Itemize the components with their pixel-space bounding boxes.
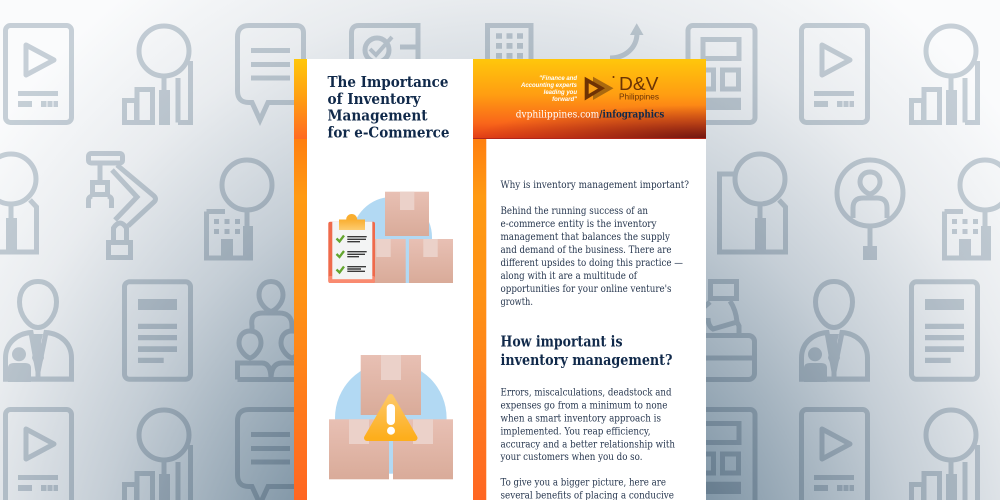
title: Management xyxy=(328,108,428,125)
section heading xyxy=(500,334,672,369)
tagline: "Finance and xyxy=(539,76,577,82)
intro text: Why is inventory management important? xyxy=(500,179,689,191)
icon: video document row 4 xyxy=(6,410,72,500)
body text: when a smart inventory approach is xyxy=(500,412,661,424)
illustration: boxes with checklist xyxy=(328,192,453,283)
clipboard xyxy=(328,214,375,283)
left accent strip xyxy=(294,59,307,500)
illustration: boxes with warning xyxy=(329,355,453,479)
icon: office building xyxy=(488,26,531,59)
warning sign xyxy=(367,397,414,438)
bottom right box xyxy=(393,419,453,479)
intro text: growth. xyxy=(500,296,533,308)
icon: building magnifier left xyxy=(206,160,272,260)
tagline xyxy=(520,76,578,103)
icon: business person xyxy=(3,282,74,382)
icon: layout document xyxy=(688,26,755,122)
page panel xyxy=(294,59,706,500)
bottom right box xyxy=(409,239,453,283)
title xyxy=(328,74,450,141)
icon: speech bubble row 4 xyxy=(238,410,304,500)
body text: your customers when you do so. xyxy=(500,451,642,463)
intro text: e-commerce entity is the inventory xyxy=(500,218,657,230)
body text: implemented. You reap efficiency, xyxy=(500,426,650,438)
top box xyxy=(385,192,429,236)
intro text: different upsides to doing this practice — xyxy=(500,257,683,269)
icon: chart magnifier row 4 xyxy=(124,410,190,500)
title: for e-Commerce xyxy=(328,124,450,141)
tagline: leading you xyxy=(544,90,577,96)
bottom left box xyxy=(362,239,406,283)
intro text: opportunities for your online venture's xyxy=(500,283,672,295)
tagline: Accounting experts xyxy=(520,83,578,89)
icon: person in magnifier xyxy=(837,160,903,260)
logo wordmark: Philippines xyxy=(619,92,659,101)
website link xyxy=(516,109,665,120)
icon: speech bubble xyxy=(238,26,304,120)
body text: expenses go from a minimum to none xyxy=(500,400,668,412)
icon: building magnifier right xyxy=(944,160,1000,260)
icon: chart magnifier xyxy=(124,26,190,125)
website link: /infographics xyxy=(599,109,665,120)
icon: layout document row 4 xyxy=(688,410,755,500)
section heading: How important is xyxy=(500,334,622,350)
icon: document magnifier left xyxy=(0,154,36,252)
section heading: inventory management? xyxy=(500,352,672,369)
top box xyxy=(361,355,421,415)
bottom left box xyxy=(329,419,389,479)
body text: To give you a bigger picture, here are xyxy=(500,477,666,489)
title: of Inventory xyxy=(328,91,421,108)
icon: business person right xyxy=(799,282,870,382)
icon: group of people xyxy=(238,282,306,380)
intro text xyxy=(500,179,689,308)
icon: growth arrow xyxy=(610,23,644,58)
title: The Importance xyxy=(328,74,448,91)
intro text: along with it are a multitude of xyxy=(500,270,638,282)
logo mark xyxy=(585,76,614,100)
intro text: Behind the running success of an xyxy=(500,205,648,217)
website link: dvphilippines.com xyxy=(516,109,600,120)
body text: Errors, miscalculations, deadstock and xyxy=(500,387,672,399)
logo wordmark: D&V xyxy=(619,73,659,94)
icon: video document right xyxy=(802,26,868,122)
intro text: management that balances the supply xyxy=(500,231,670,243)
icon: video document xyxy=(6,26,72,122)
header banner xyxy=(473,59,706,139)
icon: document magnifier right xyxy=(720,154,786,252)
icon: checklist gauge xyxy=(352,26,418,62)
body text xyxy=(500,387,675,500)
tagline: forward" xyxy=(552,97,577,103)
checklist rows xyxy=(336,236,367,272)
intro text: and demand of the business. There are xyxy=(500,244,672,256)
icon: report document xyxy=(124,282,190,379)
icon: chart magnifier right xyxy=(912,26,978,125)
icon: robot arm xyxy=(88,154,156,258)
centre accent strip xyxy=(473,139,487,500)
icon: chart magnifier row 4 right xyxy=(912,410,978,500)
icon: hand and box xyxy=(690,282,754,380)
icon: video document row 4 right xyxy=(802,410,868,500)
body text: accuracy and a better relationship with xyxy=(500,438,675,450)
icon: report document right xyxy=(912,282,978,379)
